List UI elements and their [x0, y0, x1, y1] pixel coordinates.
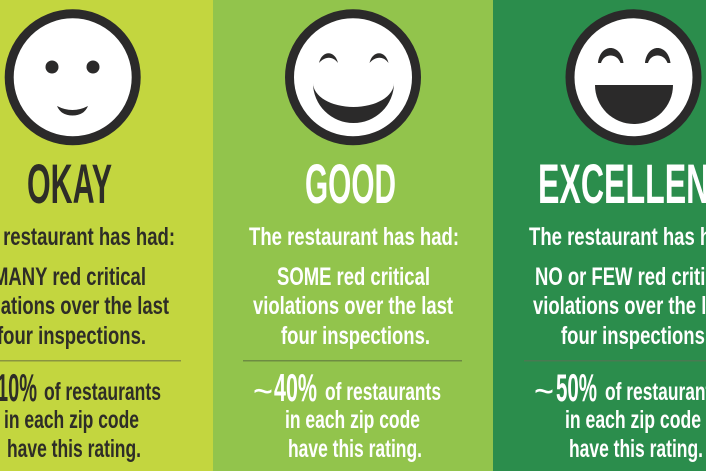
- icon: grinning face: [290, 14, 416, 141]
- text: share of restaurants: of restaurants: [325, 378, 441, 406]
- text: violations description: [253, 263, 453, 350]
- icon: neutral smiling face: [9, 14, 136, 141]
- text: share of restaurants: 50%: [556, 367, 597, 410]
- text: violations description: [533, 263, 706, 350]
- text: share of restaurants: have this rating.: [288, 435, 422, 463]
- panel: good: [213, 0, 493, 471]
- text: violations description: four inspections.: [281, 322, 430, 350]
- text: violations description: violations over the last: [253, 292, 453, 320]
- text: violations description: SOME red critical: [277, 263, 430, 291]
- text: share of restaurants: [253, 367, 441, 463]
- text: share of restaurants: of restaurants: [44, 378, 161, 406]
- panel background: good: [213, 0, 493, 471]
- text: restaurant has had: The restaurant has had:: [249, 223, 459, 251]
- text: share of restaurants: have this rating.: [7, 435, 141, 463]
- text: violations description: four inspections.: [0, 322, 146, 350]
- text: share of restaurants: ~: [534, 371, 554, 413]
- text: violations description: [0, 263, 169, 350]
- heading: okay: OKAY: [27, 152, 112, 215]
- icon: laughing face: [570, 14, 697, 141]
- panel: okay: [0, 0, 213, 471]
- text: share of restaurants: in each zip code: [4, 406, 139, 434]
- text: share of restaurants: 40%: [274, 367, 317, 410]
- text: share of restaurants: in each zip code: [285, 406, 420, 434]
- text: share of restaurants: [534, 367, 706, 463]
- heading: good: GOOD: [305, 152, 396, 215]
- panel: excellent: [493, 0, 706, 471]
- text: share of restaurants: ~: [253, 371, 273, 413]
- panel background: excellent: [493, 0, 706, 471]
- panel background: okay: [0, 0, 213, 471]
- text: share of restaurants: [0, 367, 161, 463]
